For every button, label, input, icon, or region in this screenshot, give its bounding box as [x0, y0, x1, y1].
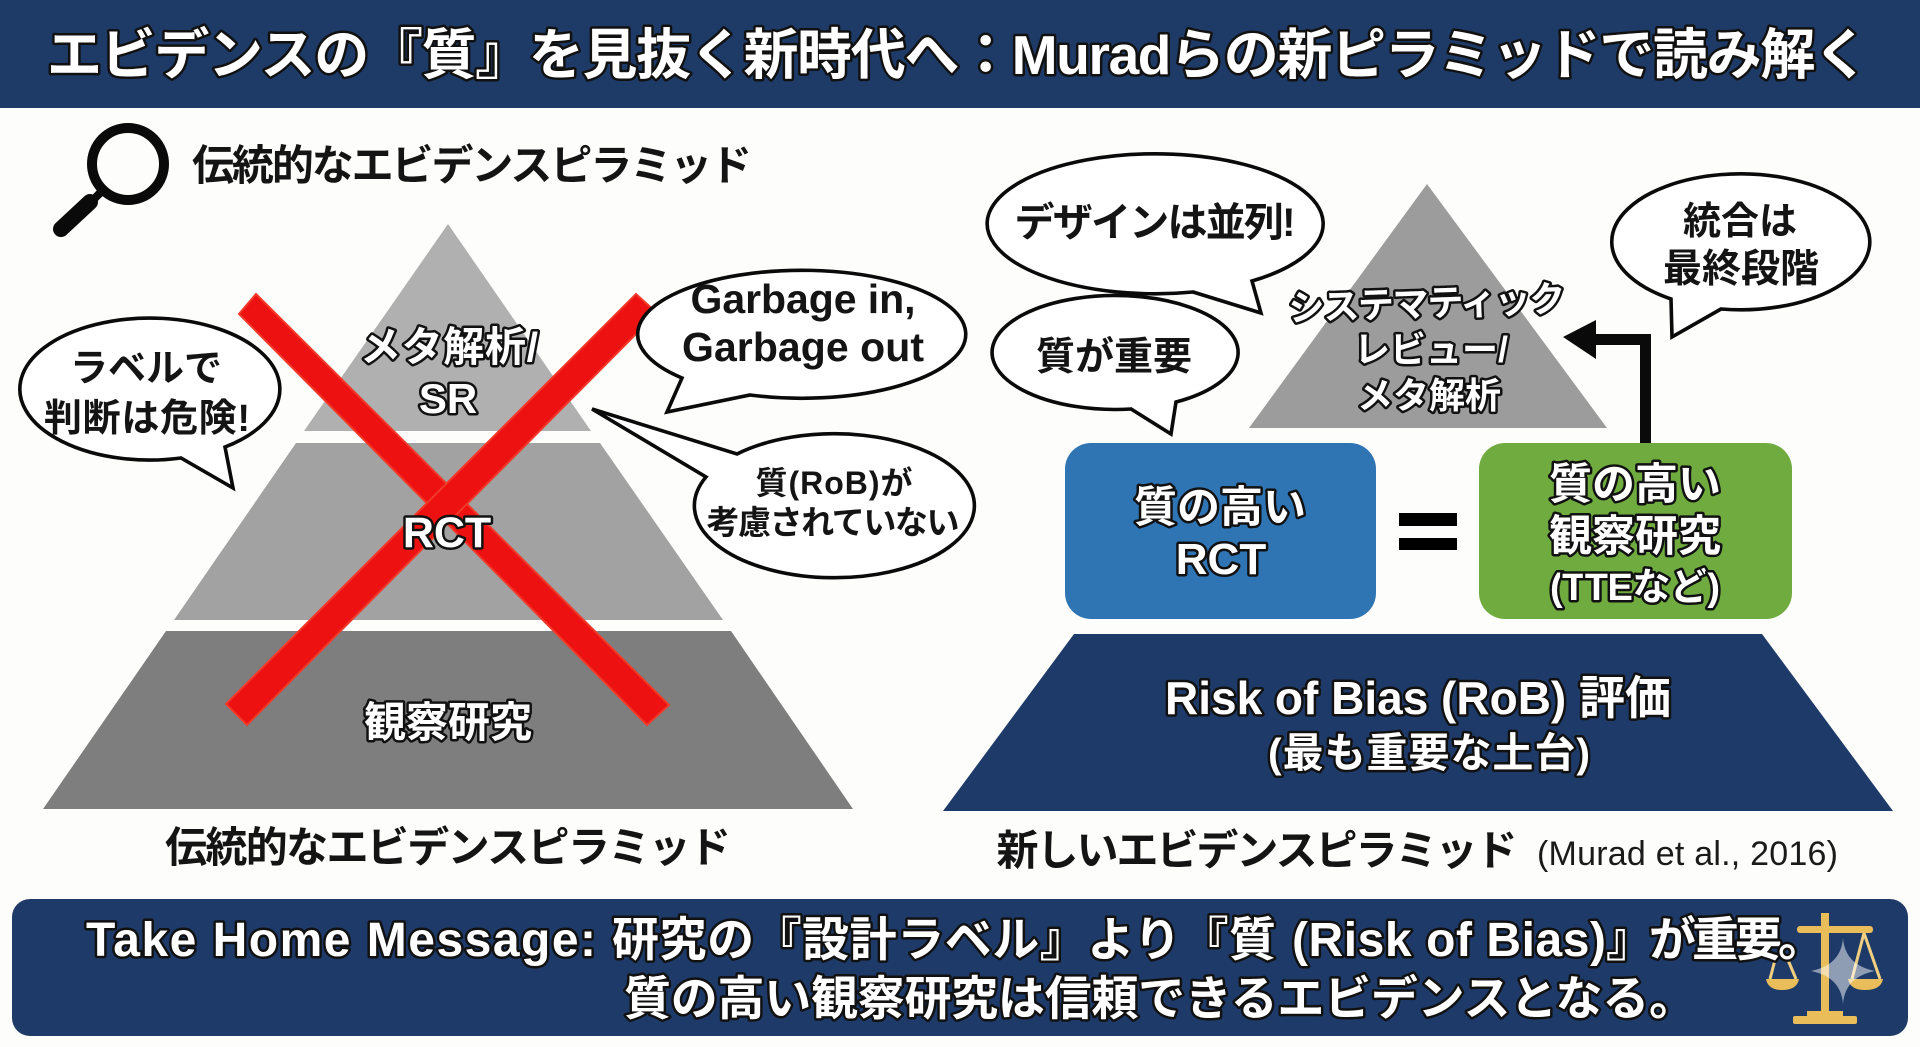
bubble: designs are parallel: デザインは並列! [1014, 200, 1296, 245]
title bar [0, 0, 1920, 108]
box: high quality observational studies: 観察研究 [1549, 513, 1721, 561]
bubble: quality not considered [592, 409, 974, 578]
bubble: quality not considered: 質(RoB)が [756, 465, 912, 501]
apex triangle: systematic review: メタ解析 [1357, 375, 1501, 416]
message line two: 質の高い観察研究は信頼できるエビデンスとなる。 [624, 972, 1696, 1025]
bubble: garbage in garbage out: Garbage out [682, 324, 924, 370]
box: high quality RCT [1065, 443, 1376, 619]
bubble: quality not considered: 考慮されていない [706, 504, 960, 541]
bubble: label judgement is dangerous: ラベルで [70, 348, 222, 390]
bubble: synthesis is the final stage [1612, 174, 1870, 337]
message line one: 』が重要。 [1606, 913, 1825, 966]
foundation: risk of bias assessment: (最も重要な土台) [1268, 730, 1590, 776]
foundation: risk of bias assessment: Risk of Bias (RoB) 評価 [1165, 672, 1671, 724]
foundation: risk of bias assessment [943, 634, 1893, 811]
box: high quality observational studies [1479, 443, 1792, 619]
bubble: quality matters: 質が重要 [1036, 336, 1192, 379]
pyramid middle tier [174, 443, 723, 620]
apex triangle: systematic review: レビュー/ [1354, 329, 1508, 370]
message line one: Take Home Message: [86, 914, 596, 967]
icon: magnifying glass [61, 128, 164, 229]
icon: balance scale [1766, 913, 1883, 1024]
bubble: garbage in garbage out: Garbage in, [690, 276, 916, 322]
bubble: garbage in garbage out [638, 270, 966, 412]
box: high quality observational studies: 質の高い [1549, 461, 1721, 509]
pyramid bottom tier [43, 631, 853, 809]
message line one: 研究の『設計ラベル』より『質 [612, 913, 1276, 966]
bubble: quality matters [992, 295, 1238, 434]
red cross [226, 294, 669, 725]
box: high quality observational studies: (TTEなど) [1550, 567, 1720, 609]
apex triangle: systematic review: システマティック [1288, 278, 1566, 329]
panel: traditional pyramid [20, 128, 974, 871]
equals sign [1399, 513, 1457, 550]
label: observational studies: 観察研究 [364, 699, 532, 746]
label: meta-analysis / SR: メタ解析/ [360, 324, 538, 370]
bubble: synthesis is the final stage: 統合は [1683, 201, 1797, 243]
citation: (Murad et al., 2016) [1537, 835, 1838, 873]
message line one [86, 913, 1825, 967]
panel: take home message [12, 899, 1908, 1036]
pyramid top tier [304, 224, 591, 431]
bubble: label judgement is dangerous [20, 318, 280, 488]
caption: traditional pyramid: 伝統的なエビデンスピラミッド [165, 824, 731, 871]
apex triangle: systematic review [1249, 184, 1607, 428]
caption: new pyramid: 新しいエビデンスピラミッド [996, 827, 1518, 874]
bubble: designs are parallel [987, 154, 1323, 313]
box: high quality RCT: 質の高い [1134, 484, 1306, 532]
bubble: synthesis is the final stage: 最終段階 [1663, 248, 1819, 291]
label: meta-analysis / SR [360, 324, 538, 422]
panel: new pyramid [943, 154, 1893, 874]
label: RCT: RCT [403, 509, 491, 557]
message line one: (Risk of Bias) [1292, 914, 1606, 967]
label: meta-analysis / SR: SR [419, 375, 477, 422]
arrow: up to synthesis [1563, 320, 1651, 443]
heading: traditional pyramid: 伝統的なエビデンスピラミッド [192, 142, 752, 189]
bubble: label judgement is dangerous: 判断は危険! [44, 398, 250, 440]
box: high quality RCT: RCT [1176, 535, 1266, 584]
title bar: エビデンスの『質』を見抜く新時代へ：Muradらの新ピラミッドで読み解く [47, 24, 1869, 86]
